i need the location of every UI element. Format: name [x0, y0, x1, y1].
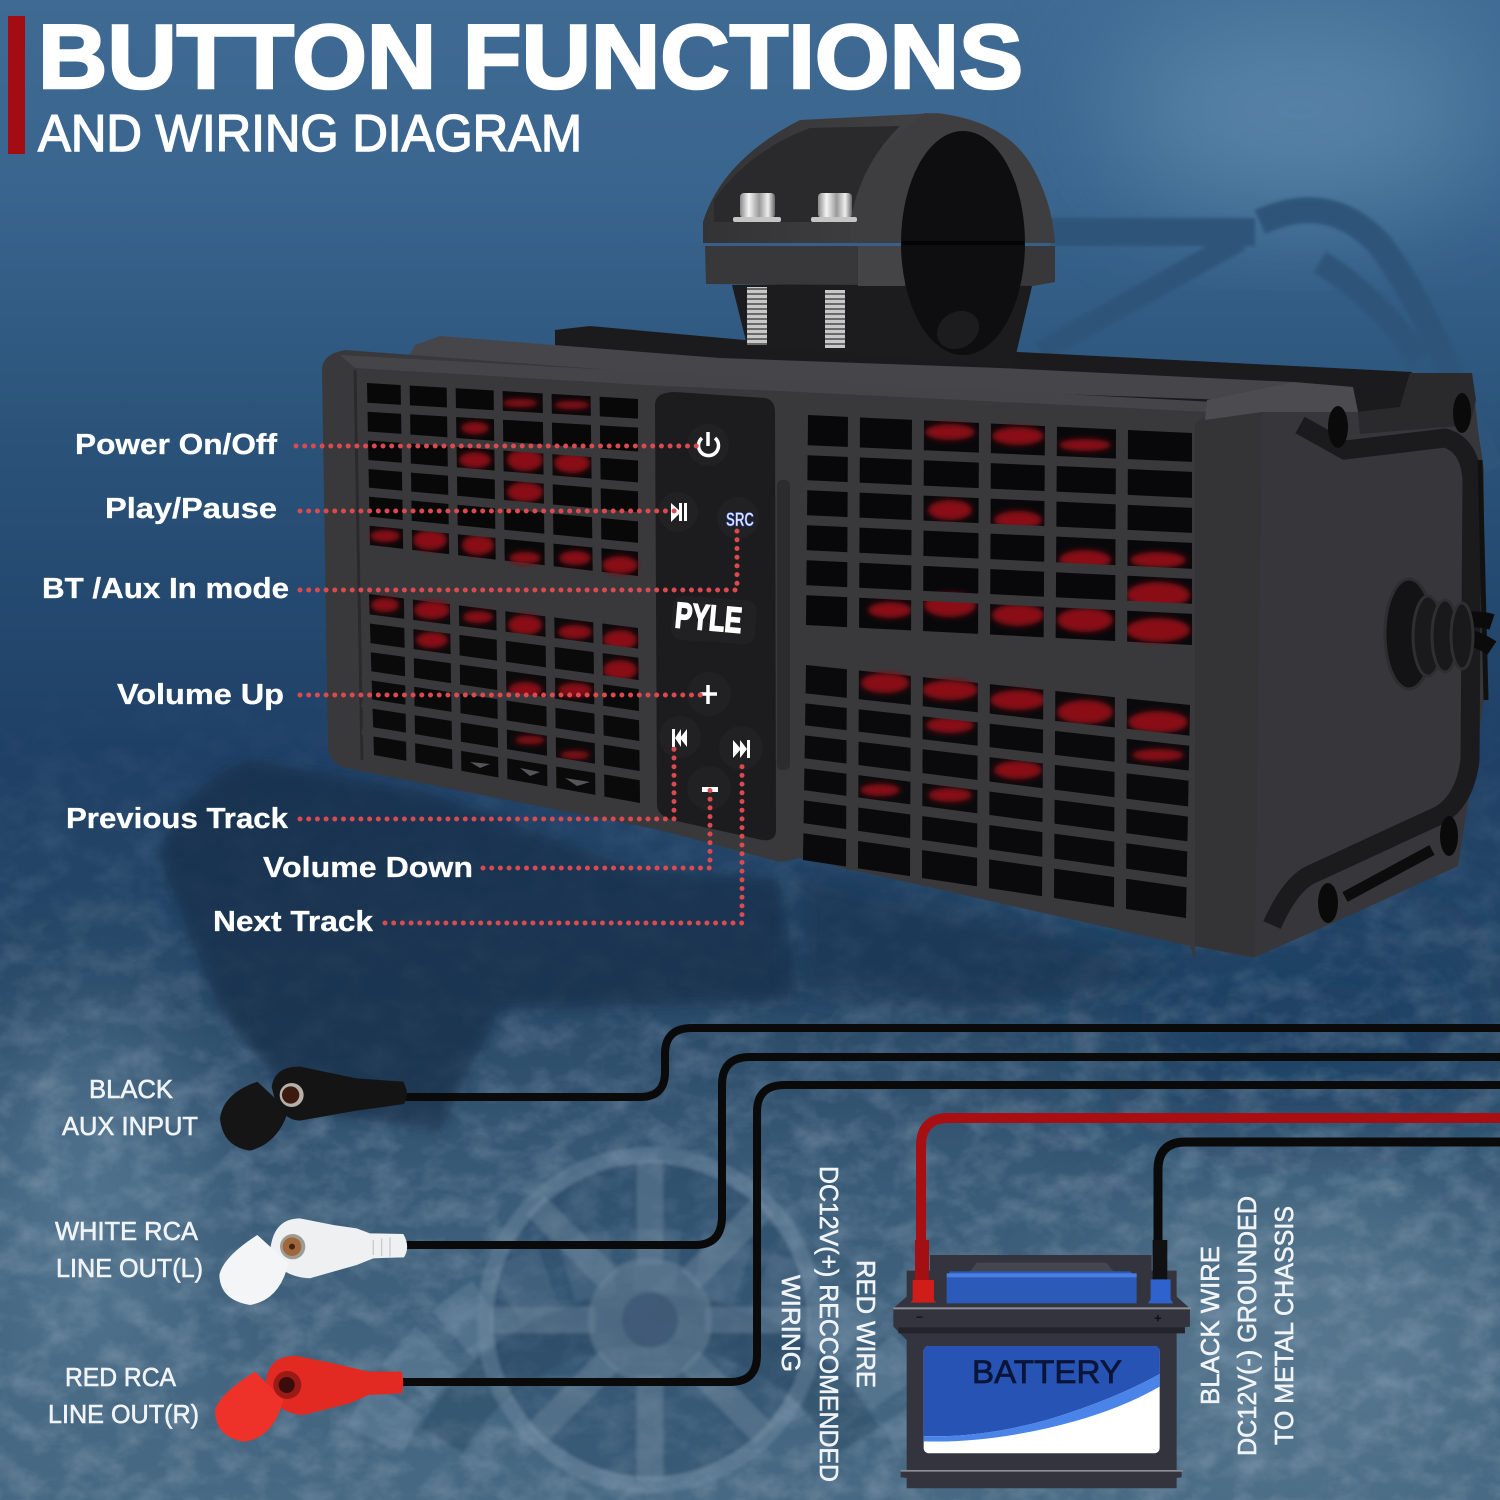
- black wire annotation: [1195, 1196, 1299, 1456]
- lower row glints: [470, 762, 590, 786]
- left grille: [362, 375, 645, 806]
- label: source mode: BT /Aux In mode: [42, 573, 289, 605]
- body: [322, 350, 1207, 960]
- label: black aux: AUX INPUT: [62, 1111, 198, 1141]
- wire: red rca: [400, 1085, 1500, 1382]
- right grille: [802, 410, 1195, 918]
- battery: +: [1154, 1311, 1162, 1326]
- icon: next track: [733, 740, 750, 758]
- label: volume up: Volume Up: [117, 679, 284, 711]
- PYLE logo: PYLE: [673, 594, 744, 641]
- icon: volume up: [700, 685, 717, 704]
- SRC button text: SRC: [726, 510, 754, 531]
- label: volume down: Volume Down: [263, 852, 473, 884]
- text: metal chassis: TO METAL CHASSIS: [1269, 1206, 1299, 1445]
- connector labels: [48, 1074, 203, 1429]
- battery: [893, 1240, 1191, 1488]
- battery wordmark: BATTERY: [972, 1354, 1122, 1390]
- red wire annotation: [776, 1166, 881, 1482]
- text: dc12v negative: DC12V(-) GROUNDED: [1232, 1196, 1262, 1456]
- button pads: [658, 424, 763, 810]
- speaker product: [322, 326, 1492, 960]
- control panel: [655, 392, 790, 840]
- roll cage: [1040, 210, 1490, 470]
- label: power: Power On/Off: [75, 429, 277, 461]
- button callouts: [42, 429, 742, 938]
- wire: white rca: [405, 1057, 1500, 1245]
- text: wiring: WIRING: [776, 1275, 806, 1372]
- connector: black aux: [220, 1067, 407, 1151]
- text: black wire: BLACK WIRE: [1195, 1246, 1225, 1405]
- icon: play pause: [671, 503, 687, 522]
- label: red rca: LINE OUT(R): [48, 1399, 199, 1429]
- vehicle silhouette: [160, 760, 800, 1130]
- text: red wire: RED WIRE: [851, 1260, 881, 1388]
- wire: aux input: [405, 1028, 1500, 1097]
- text: dc12v positive: DC12V(+) RECCOMENDED: [814, 1166, 844, 1482]
- label: play pause: Play/Pause: [105, 493, 277, 525]
- main heading: BUTTON FUNCTIONS: [38, 7, 1023, 108]
- label: next track: Next Track: [213, 906, 374, 938]
- clamp hole: [901, 131, 1025, 355]
- battery terminal negative: [911, 1240, 936, 1303]
- leader lines: [296, 446, 742, 923]
- subheading: AND WIRING DIAGRAM: [38, 105, 582, 163]
- end plate: [1195, 373, 1492, 958]
- wire: battery negative black: [1158, 1142, 1500, 1285]
- icon: power: [699, 432, 718, 456]
- label: previous track: Previous Track: [66, 803, 289, 835]
- label: black aux: [62, 1074, 198, 1141]
- battery: −: [916, 1310, 923, 1324]
- label: black aux: BLACK: [89, 1074, 174, 1104]
- icon: volume down: [702, 787, 718, 792]
- battery label panel: [924, 1346, 1160, 1453]
- connector: red rca: [215, 1356, 403, 1442]
- label: red rca: [48, 1362, 199, 1429]
- label: white rca: LINE OUT(L): [56, 1253, 203, 1283]
- label: white rca: WHITE RCA: [55, 1216, 199, 1246]
- battery terminal positive: [1148, 1240, 1173, 1303]
- top rail: [555, 326, 1412, 415]
- label: white rca: [55, 1216, 203, 1283]
- label: red rca: RED RCA: [65, 1362, 177, 1392]
- wiring: [400, 1028, 1500, 1382]
- wire: battery positive red: [921, 1118, 1500, 1285]
- rubber grommet and cable: [1385, 579, 1492, 689]
- connector: white rca: [219, 1218, 407, 1305]
- red accent bar: [8, 16, 25, 154]
- bolts: [733, 193, 857, 348]
- wheel and tyre: [375, 1155, 925, 1485]
- title block: [8, 7, 1023, 163]
- icon: previous track: [672, 729, 687, 747]
- mounting clamp: [703, 113, 1055, 367]
